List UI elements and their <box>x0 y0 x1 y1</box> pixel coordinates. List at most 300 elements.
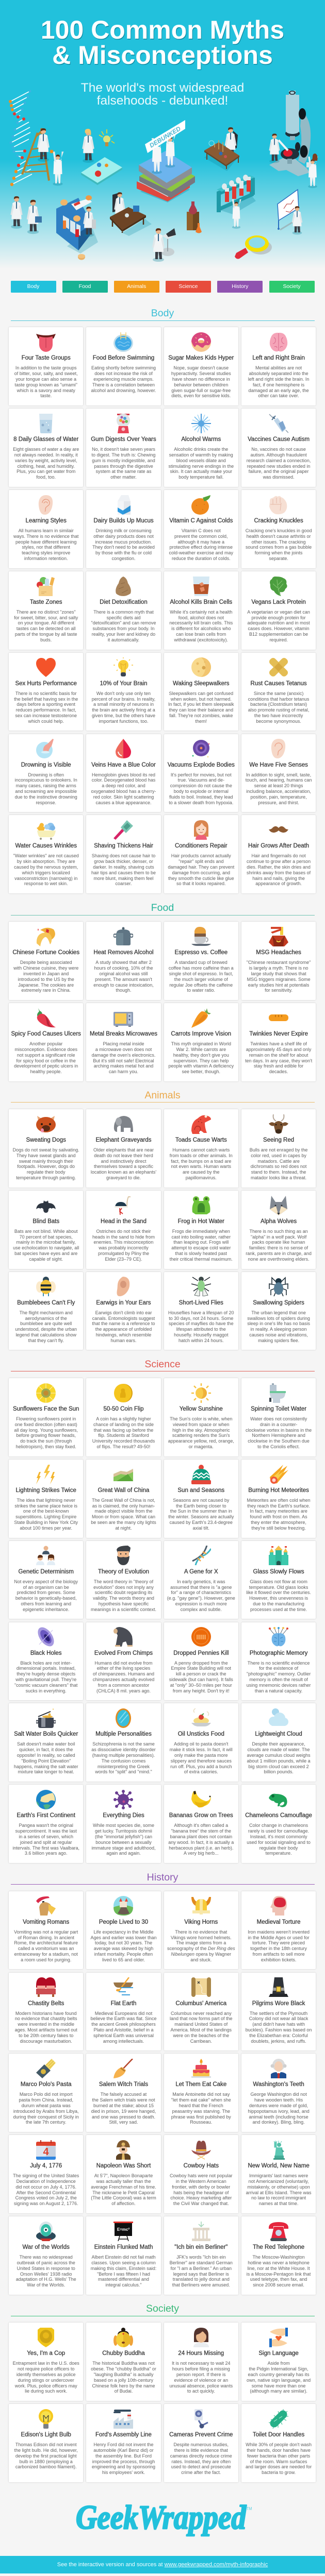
card: Sex Hurts Performance <box>9 653 83 731</box>
title: MSG Headaches <box>256 950 301 956</box>
text: Shaving does not cause hair to <box>92 853 155 858</box>
text <box>9 2092 83 2125</box>
text: evidence of violence or an <box>174 2378 228 2383</box>
text: did not occur on July 4, 1776. <box>15 2184 76 2190</box>
icon: gold coin <box>113 1383 133 1403</box>
text: We don't only use only ten <box>96 691 151 696</box>
text: Orson Welles' 1938 radio <box>20 2272 72 2277</box>
text <box>9 1416 83 1450</box>
text: due to the manufacturing <box>253 1601 304 1606</box>
icon: virus <box>113 1790 133 1809</box>
text <box>241 1741 316 1775</box>
icon: swimming pool <box>113 332 133 352</box>
card: Food Before Swimming <box>86 327 161 405</box>
text: Aside from <box>268 2361 290 2366</box>
category navigation buttons: Animals <box>127 284 146 290</box>
title: Cameras Prevent Crime <box>169 2432 233 2438</box>
text: understood, despite the urban <box>15 1327 77 1332</box>
text: found with frost on them. As <box>250 1514 307 1519</box>
text: There is no scientific basis for <box>15 691 76 696</box>
title: 24 Hours Missing <box>178 2350 224 2357</box>
icon: grocery bag <box>37 577 55 596</box>
title: Spinning Toilet Water <box>251 1406 306 1412</box>
text: Sleepwalkers can get confused <box>169 691 233 696</box>
icon: yellow light bulb <box>36 2409 56 2429</box>
text: supercontinent. It was the last <box>15 1828 77 1834</box>
text: fact, the bumps on a toad are <box>171 1159 231 1164</box>
text: autism. Although fraudulent <box>251 452 307 457</box>
text <box>164 853 238 887</box>
title: Yellow Sunshine <box>180 1406 223 1412</box>
text: (although many are similar). <box>250 2388 307 2394</box>
card: Spicy Food Causes Ulcers <box>9 1003 83 1081</box>
text: However, this unevenness is <box>249 1596 308 1601</box>
title: Glass Slowly Flows <box>253 1569 304 1575</box>
text: heliotropism), then stay fixed. <box>16 1444 76 1449</box>
card: Oil Unsticks Food <box>164 1703 238 1782</box>
text: Black holes are not inter- <box>20 1660 72 1666</box>
text: location known as an elephants' <box>91 1170 156 1175</box>
text: legend that calculations show <box>15 1332 76 1337</box>
text: words for "split" and "mind." <box>95 1769 152 1774</box>
icon: galaxy <box>191 739 211 758</box>
text: packs operate like human <box>252 1240 305 1245</box>
text: Henry Ford did not invent the <box>93 2442 154 2447</box>
text: they can lose their balance and <box>169 707 233 713</box>
icon: girl with long hair <box>191 820 211 840</box>
icon: ear <box>113 1277 133 1296</box>
icon: bananas <box>191 1790 211 1809</box>
text: Moon or from space. What can <box>92 1514 155 1519</box>
icon: chili pepper <box>36 1008 56 1028</box>
text: crime after the fact. <box>181 2470 221 2475</box>
text: Ostriches do not stick their <box>96 1229 151 1234</box>
text: "laughing Buddha" is actually <box>94 2372 153 2377</box>
text: Schizophrenia is not the same <box>92 1741 155 1747</box>
text: Although it's often called a <box>174 1823 228 1828</box>
text: MSG triggers migraines. Some <box>247 977 311 982</box>
text: they smooth the cuticle like glue <box>168 876 234 881</box>
text: provide enough protein for <box>252 615 306 620</box>
text: George Washington did not <box>250 2092 307 2097</box>
text: They don't need to be avoided <box>92 545 155 550</box>
icon: ear <box>269 739 288 758</box>
text <box>92 528 155 561</box>
illustration: book stack with DEBUNKED sign: DEBUNKED <box>148 125 182 149</box>
icon: chimp <box>113 1627 133 1647</box>
text: behavior is genetically-based, <box>15 1596 76 1601</box>
text: damaged at an early age, the <box>249 388 309 393</box>
text: including balance, acceleration, <box>246 789 311 794</box>
text: than a natural capacity. <box>255 1688 302 1693</box>
text: used for social signaling and to <box>247 1840 311 1845</box>
card: Ford's Assembly Line <box>86 2404 161 2482</box>
icon: twinkie <box>269 1008 288 1028</box>
text: identify themselves as police <box>17 2372 75 2377</box>
icon: bearded man <box>113 1546 133 1565</box>
card: MSG Headaches <box>241 922 316 1000</box>
text: Twinkies have a shelf life of <box>250 1041 307 1046</box>
icon: razor <box>113 820 133 840</box>
icon: bull head <box>269 1114 288 1134</box>
text <box>9 1310 83 1344</box>
card: Yellow Sunshine <box>164 1378 238 1456</box>
text: believe the Earth was flat. Since <box>90 2016 157 2021</box>
text: Alcoholic drinks create the <box>174 447 228 452</box>
text: is different for alcoholics who <box>171 626 231 631</box>
title: Vegans Lack Protein <box>251 599 306 605</box>
text: While it's certainly not a health <box>170 609 232 615</box>
icon: leg in water <box>36 739 56 758</box>
title: Sweating Dogs <box>26 1137 66 1143</box>
text: to the Coriolis effect. <box>257 1444 300 1449</box>
text: The historical Buddha was not <box>92 2361 155 2366</box>
text: Humans cannot catch warts <box>172 1147 230 1153</box>
text: War of the Worlds. <box>27 2282 65 2287</box>
text: vasoconstriction (narrowing) in <box>14 876 77 881</box>
text: at "only" 30–50 miles per hour <box>170 1683 232 1688</box>
text: evolution" does not imply any <box>93 1585 154 1590</box>
text: the Civil War changed that. <box>173 2201 229 2206</box>
text: It is not necessary to wait 24 <box>172 2361 231 2366</box>
text: introduced to the US by the <box>18 977 74 982</box>
text: Cracking one's knuckles in good <box>246 528 312 533</box>
text: research claimed a connection, <box>247 458 311 463</box>
text: body to explode or internal <box>174 789 229 794</box>
text: food, alcohol does not <box>178 615 224 620</box>
text: hats being the headgear of <box>173 2190 229 2195</box>
text <box>86 960 161 993</box>
card: Burning Hot Meteorites <box>241 1460 316 1538</box>
heading: History <box>10 1871 315 1885</box>
text <box>241 772 316 805</box>
title: 100 Common Myths <box>41 15 284 44</box>
text: the belief that having sex in the <box>14 697 78 702</box>
text: The Sun's color is white, when <box>170 1416 232 1421</box>
text: Nibelungen opera by Wagner <box>171 1952 231 1957</box>
text: War 2. While carrots are <box>176 1047 226 1052</box>
text: A very big herb... <box>184 1851 219 1856</box>
icon: red toad <box>191 1114 211 1134</box>
icon: tongue <box>36 334 56 352</box>
text: caused by the nervous system, <box>14 865 78 870</box>
icon: castle on hill <box>113 1896 133 1916</box>
icon: sunflower <box>36 1383 56 1403</box>
text: with gravitational pull. They're <box>15 1677 76 1682</box>
category navigation buttons: Society <box>283 284 301 290</box>
text: see better, though. <box>182 1069 220 1074</box>
title: Espresso vs. Coffee <box>174 950 228 956</box>
card: 8 Daily Glasses of Water <box>9 409 83 487</box>
text: slippery and therefore sauces <box>171 1758 232 1764</box>
card: Toilet Door Handles <box>241 2404 316 2482</box>
title: Napoleon Was Short <box>96 2163 151 2169</box>
text: taste group known as "umami" <box>14 382 77 387</box>
title: Gum Digests Over Years <box>91 436 156 443</box>
card: Short-Lived Flies <box>164 1272 238 1350</box>
text <box>164 1041 238 1075</box>
card: Great Wall of China <box>86 1460 161 1538</box>
title: Burning Hot Meteorites <box>248 1487 309 1494</box>
text: Plus, you can get water from <box>17 469 75 474</box>
text: enemies. This misconception <box>94 1240 153 1245</box>
icon: viking helmet <box>191 1896 211 1916</box>
card: Chinese Fortune Cookies <box>9 922 83 1000</box>
text: footpads. However, dogs do <box>17 1164 75 1169</box>
text: assumed that there is "a gene <box>170 1585 232 1590</box>
card: Columbus' America <box>164 1973 238 2050</box>
text: Seasons are not caused by <box>173 1498 229 1503</box>
icon: blackboard <box>113 2222 133 2241</box>
text: Dogs do not sweat by salivating. <box>13 1147 79 1153</box>
icon: calendar: 4 <box>43 2146 50 2158</box>
title: & Misconceptions <box>52 40 273 69</box>
card: Vegans Lack Protein <box>241 571 316 650</box>
icon: George Washington <box>269 2059 288 2078</box>
text <box>14 691 78 724</box>
text: hatch within 24 hours. <box>178 1338 224 1343</box>
text: only make the pasta more <box>174 1753 228 1758</box>
card: July 4, 1776 <box>9 2135 83 2213</box>
text: canals. Entomologists suggest <box>92 1316 155 1321</box>
card: Left and Right Brain <box>241 327 316 405</box>
text <box>86 2442 161 2476</box>
text <box>164 1579 238 1613</box>
text: and one was pressed to death. <box>92 2114 155 2120</box>
card: Let Them Eat Cake <box>164 2054 238 2132</box>
text: own, native sign language, and <box>247 2378 311 2383</box>
title: "Ich bin ein Berliner" <box>174 2244 228 2250</box>
text: among intellectuals. <box>103 2039 144 2044</box>
text: Bulls are not enraged by the <box>250 1147 307 1153</box>
title: 8 Daily Glasses of Water <box>13 436 78 443</box>
text: experiencing muscle cramps. <box>93 377 154 382</box>
text: A standard cup of brewed <box>175 960 228 965</box>
text: themselves toward a specific <box>94 1164 153 1169</box>
text: Marco Polo did not import <box>20 2092 72 2097</box>
text: also promote rusting of metal, <box>248 707 309 713</box>
text: Eight glasses of water a day are <box>13 447 79 452</box>
text <box>241 2255 316 2288</box>
illustration: blue rack with jars <box>56 195 98 253</box>
heading: Society <box>10 2302 315 2316</box>
card: Heat Removes Alcohol <box>86 922 161 1000</box>
text: people have different learning <box>15 539 76 545</box>
text: epigenetic inheritance. <box>23 1607 69 1612</box>
text: land that now forms part of the <box>170 2016 233 2021</box>
title: Flat Earth <box>111 2001 136 2007</box>
title: Marco Polo's Pasta <box>21 2081 72 2088</box>
text: was actually taller than the <box>96 2179 151 2184</box>
title: People Lived to 30 <box>99 1919 148 1925</box>
icon: crossed bandages <box>269 657 288 677</box>
text: joined and split at regular <box>20 1840 72 1845</box>
icon: heart <box>36 658 56 677</box>
section: Animals <box>9 1089 316 1350</box>
heading: Food <box>10 901 315 916</box>
text: increase mucus production. <box>95 539 152 545</box>
text: intervals. The first was Vaalbara, <box>12 1845 79 1851</box>
text <box>241 1579 316 1613</box>
title: Sun and Seasons <box>177 1487 224 1494</box>
text: There is a correlation between <box>92 382 155 387</box>
text: is a Moscow-Pentagon link that <box>247 2272 311 2277</box>
text: "Before I was fifteen I had <box>97 2272 150 2277</box>
text <box>164 960 238 993</box>
text: have shown no difference in <box>172 377 230 382</box>
text <box>171 365 231 398</box>
title: Lightning Strikes Twice <box>15 1487 76 1494</box>
text: heard that the French <box>179 2103 223 2108</box>
text: Vitamin C does not <box>182 528 221 533</box>
text: There are no distinct "zones" <box>17 609 76 615</box>
text: improved the process, through <box>92 2459 155 2464</box>
icon: glass of water <box>39 414 53 433</box>
text: run off. Plus, you add a bunch <box>170 1764 232 1769</box>
text: obese. The "chubby Buddha" or <box>91 2366 156 2371</box>
text: ten days. In any case, they won't <box>245 1058 312 1063</box>
text <box>86 1041 161 1075</box>
icon: fly <box>191 1277 211 1296</box>
card: Dropped Pennies Kill <box>164 1622 238 1700</box>
card: Cracking Knuckles <box>241 490 316 568</box>
text: immature stage and adulthood, <box>91 1845 156 1851</box>
text: tastes can be detected on all <box>17 626 75 631</box>
text: it automatically. <box>108 637 139 642</box>
text <box>241 1929 316 1963</box>
icon: donut <box>191 332 211 352</box>
text: At 5'7", Napoleon Bonaparte <box>94 2173 153 2178</box>
text: percent of our brains. In reality, <box>92 697 155 702</box>
text: Color change in chameleons <box>249 1823 308 1828</box>
text <box>164 1498 238 1531</box>
text: necessarily kill brain cells. This <box>169 620 233 625</box>
title: Theory of Evolution <box>98 1569 149 1575</box>
text: again and again. <box>106 1851 141 1856</box>
text: "let them eat cake" when she <box>171 2097 231 2103</box>
text: response. <box>36 800 56 805</box>
text: Hair products cannot actually <box>171 853 231 858</box>
text: important functions, too. <box>99 719 149 724</box>
text: were on the beaches of the <box>173 2033 229 2038</box>
card: Drowning is Visible <box>9 734 83 812</box>
text: Carribean. <box>190 2039 212 2044</box>
text: can harm you. <box>109 1069 138 1074</box>
text: a microwave oven does not <box>95 1047 152 1052</box>
text: the Earth being closer to <box>176 1503 226 1509</box>
text: that was facing up before the <box>94 1428 153 1433</box>
illustration: teal test tube rack <box>217 175 256 229</box>
text: reality, your liver and kidney do <box>92 632 155 637</box>
text: none are overthrowing elders. <box>248 1257 310 1262</box>
text: misconception. Evidence does <box>14 1047 77 1052</box>
text: styles, nor that different <box>22 545 70 550</box>
text: There is no evidence that <box>175 1929 227 1935</box>
text: no law to record immigrant <box>251 2195 306 2200</box>
text: mastered differential and <box>98 2277 149 2282</box>
card: Sugar Makes Kids Hyper <box>164 327 238 405</box>
text: United States in response to <box>17 2266 75 2271</box>
title: Alcohol Warms <box>181 436 221 443</box>
text: no evidence that chastity belts <box>15 2016 77 2021</box>
icon: bumblebee <box>36 1277 56 1296</box>
title: Vaccines Cause Autism <box>248 436 310 443</box>
text: doublets, jerkins, and ruffs. <box>251 2039 306 2044</box>
text: forming when the joints <box>255 550 302 555</box>
text <box>9 2011 83 2044</box>
text: legend says that Berliner is <box>173 2272 229 2277</box>
text: that they can't fly. <box>28 1338 64 1343</box>
text: hypothesis have specific <box>99 1601 149 1606</box>
text: the Sun in the summer than in <box>170 1509 232 1514</box>
text: ways. There is no evidence that <box>13 534 78 539</box>
icon: Brandenburg gate <box>191 2222 211 2241</box>
text: Placing metal inside <box>103 1041 144 1046</box>
illustration: flasks on stand <box>187 201 202 233</box>
text <box>86 1498 161 1531</box>
icon: wired brain <box>269 1627 288 1647</box>
icon: roman helmet <box>36 1896 56 1916</box>
text <box>86 772 161 805</box>
text <box>9 1498 83 1531</box>
text: Cowboy hats were not popular <box>170 2173 233 2178</box>
text: Humans did not evolve from <box>94 1660 153 1666</box>
text: failure, and the original paper <box>249 469 308 474</box>
text: stand to them. Instead, the <box>251 1170 306 1175</box>
text: misinterpreting the Greek <box>98 1764 150 1769</box>
text: dimensional portals. Instead, <box>17 1666 75 1671</box>
text: are caused by the <box>183 1170 220 1175</box>
text: rarely is used for camouflage. <box>248 1828 309 1834</box>
text: inconspicuous to onlookers. In <box>15 777 77 783</box>
text: stay fresh and edible for <box>254 1063 303 1069</box>
text: fewer bacteria than other parts <box>247 2453 310 2459</box>
text: State Building in New York City <box>14 1520 78 1525</box>
text <box>241 691 316 724</box>
card: Carrots Improve Vision <box>164 1003 238 1081</box>
text: in the Middle Ages or used for <box>248 1935 310 1940</box>
text: healthy people. <box>30 1069 62 1074</box>
card: Chameleons Camouflage <box>241 1785 316 1863</box>
text: burned at the stake; about 15 <box>93 2103 154 2108</box>
text <box>86 2361 161 2394</box>
text <box>247 447 311 480</box>
icon: broom <box>113 2059 133 2078</box>
text: coffee has more caffeine than a <box>169 965 234 971</box>
heading: Society: Society <box>146 2303 179 2314</box>
text: get lucky. Turritopsis dohrnii <box>95 1828 152 1834</box>
text: JFK's words "Ich bin ein <box>176 2255 226 2260</box>
illustration: scientist at brown desk <box>110 192 152 236</box>
title: Washington's Teeth <box>253 2081 304 2088</box>
illustration: scientist at lab desk <box>204 127 239 171</box>
text: translated to jelly donut and <box>173 2277 230 2282</box>
text <box>241 2361 316 2394</box>
text <box>14 365 78 398</box>
text: bulb in 1880 (employing a <box>20 2459 73 2464</box>
card: Sun and Seasons <box>164 1460 238 1538</box>
text: as is claimed, the only human- <box>92 1503 155 1509</box>
text: temperature through panting. <box>16 1175 76 1180</box>
title: Elephant Graveyards <box>95 1137 152 1143</box>
card: Chubby Buddha <box>86 2323 161 2401</box>
heading: Food: Food <box>151 902 174 913</box>
text: to water ratio. <box>187 988 215 993</box>
text: There is no scientific evidence <box>248 1660 310 1666</box>
text: shrinks away from the bases of <box>247 870 311 875</box>
text <box>164 1310 238 1344</box>
subtitle: falsehoods - debunked! <box>97 94 228 108</box>
